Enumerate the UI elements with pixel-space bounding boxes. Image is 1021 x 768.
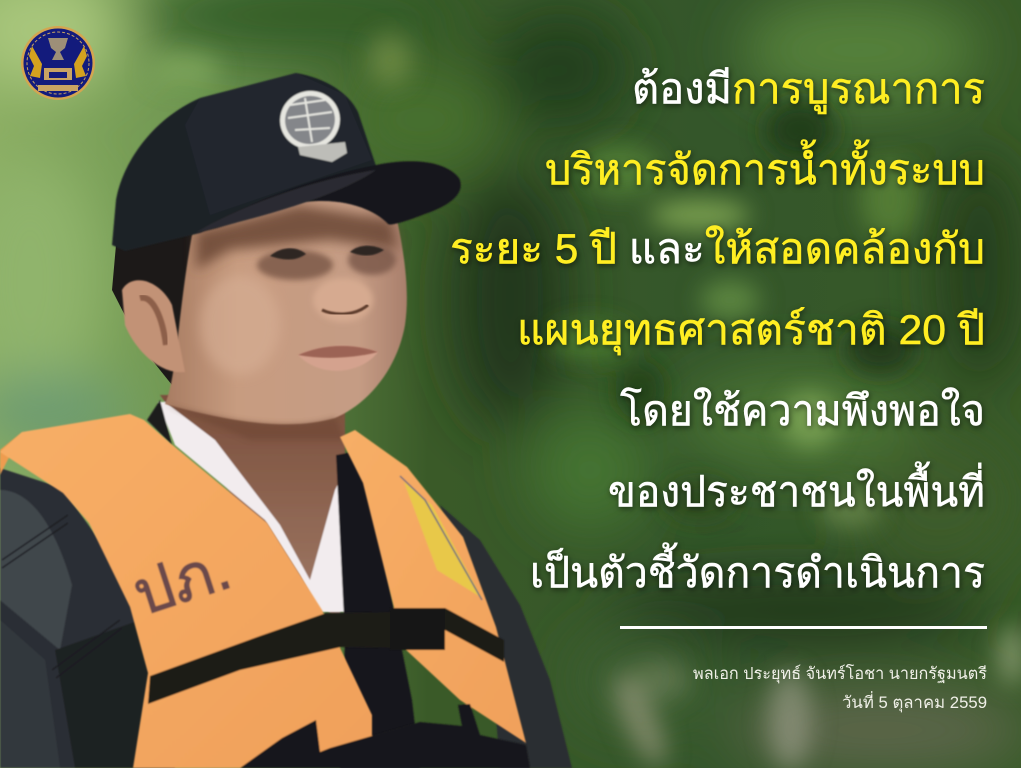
lips <box>298 346 378 371</box>
cheek highlight <box>200 275 280 375</box>
line 2: บริหารจัดการน้ำทั้งระบบ <box>545 139 985 193</box>
line 1: ต้องมีการบูรณาการ <box>632 65 985 114</box>
line 6: ของประชาชนในพื้นที่ <box>608 461 985 515</box>
photo: man in cap and life vest <box>0 73 572 768</box>
attribution <box>693 664 987 713</box>
neck and shirt <box>147 395 420 768</box>
nose <box>313 278 373 322</box>
date: วันที่ 5 ตุลาคม 2559 <box>842 691 987 713</box>
face <box>165 190 407 424</box>
line 4: แผนยุทธศาสตร์ชาติ 20 ปี <box>517 306 985 356</box>
cap badge <box>274 84 347 162</box>
line 3: ระยะ 5 ปี และให้สอดคล้องกับ <box>450 225 985 272</box>
chest strap and buckle <box>148 608 504 704</box>
hair <box>112 225 205 385</box>
chin shadow <box>165 404 345 440</box>
cap <box>112 73 461 251</box>
brim shadow on forehead <box>196 205 398 270</box>
line 5: โดยใช้ความพึงพอใจ <box>620 386 985 434</box>
life vest <box>0 414 530 768</box>
divider line <box>620 626 987 629</box>
speaker name: พลเอก ประยุทธ์ จันทร์โอชา นายกรัฐมนตรี <box>693 664 987 684</box>
line 7: เป็นตัวชี้วัดการดำเนินการ <box>530 542 985 596</box>
jacket <box>0 468 572 768</box>
eyes <box>270 248 306 260</box>
eye shadows <box>257 250 333 280</box>
vest lettering: ปภ. <box>125 534 239 629</box>
emblem: Office of the Prime Minister seal <box>21 26 95 100</box>
ear <box>122 280 185 372</box>
quote text <box>450 65 985 596</box>
lower straps <box>240 704 530 768</box>
head <box>112 190 407 440</box>
